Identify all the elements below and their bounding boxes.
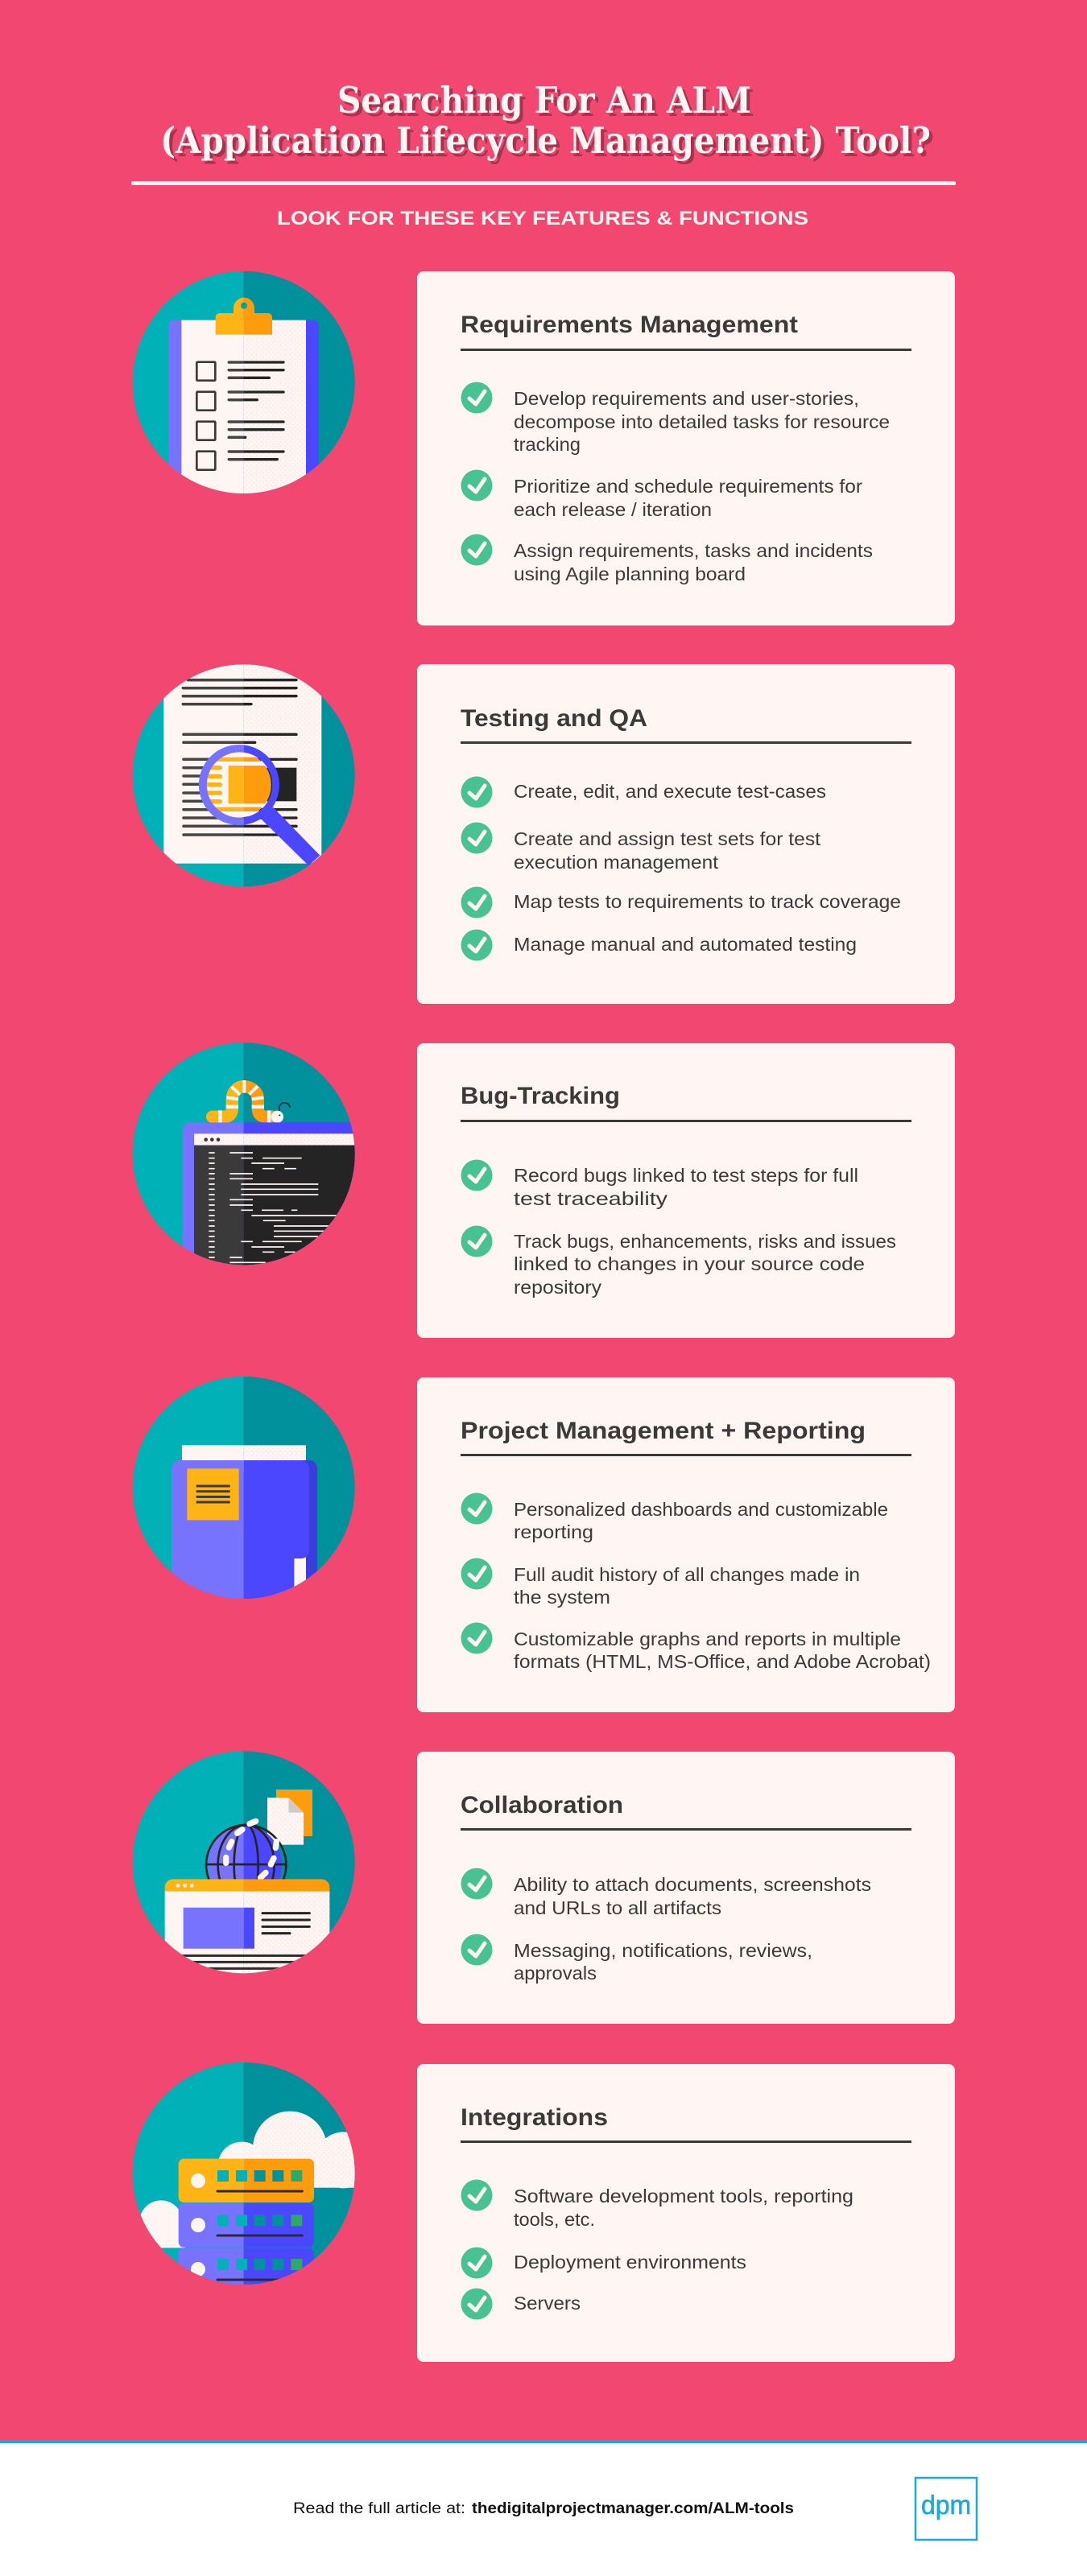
title: Searching For An ALM xyxy=(337,79,751,122)
bullet item: reporting xyxy=(514,1521,593,1542)
bullet item: Ability to attach documents, screenshots xyxy=(514,1874,871,1895)
heading: Collaboration xyxy=(461,1792,623,1818)
footer text xyxy=(293,2500,794,2517)
bullet item: formats (HTML, MS-Office, and Adobe Acrobat) xyxy=(514,1651,931,1672)
bullet item: execution management xyxy=(514,852,719,873)
bullet item: Manage manual and automated testing xyxy=(514,934,857,955)
bullet item: Create, edit, and execute test-cases xyxy=(514,781,826,802)
bullet item: Track bugs, enhancements, risks and issues xyxy=(514,1231,896,1252)
bullet item: approvals xyxy=(514,1963,597,1984)
bullet item: Software development tools, reporting xyxy=(514,2186,853,2207)
bullet item xyxy=(461,470,862,520)
bullet item xyxy=(461,1159,858,1209)
bullet item xyxy=(461,1868,871,1918)
icon: document with magnifying glass xyxy=(132,664,355,887)
dpm logo xyxy=(915,2478,977,2540)
bullet item xyxy=(461,1623,931,1672)
panel: Testing and QA xyxy=(417,664,955,1004)
bullet item xyxy=(461,887,901,918)
bullet item: Develop requirements and user-stories, xyxy=(514,388,859,409)
bullet item: Servers xyxy=(514,2293,581,2314)
bullet item xyxy=(461,1934,812,1984)
bullet item: Full audit history of all changes made in xyxy=(514,1564,860,1585)
bullet item: the system xyxy=(514,1587,610,1608)
bullet item xyxy=(461,2180,853,2230)
bullet item: and URLs to all artifacts xyxy=(514,1897,721,1918)
bullet item: Deployment environments xyxy=(514,2252,746,2273)
heading: Integrations xyxy=(461,2104,608,2131)
panel: Project Management + Reporting xyxy=(417,1377,955,1712)
bullet item xyxy=(461,2288,581,2320)
bullet item: repository xyxy=(514,1277,602,1298)
bullet item xyxy=(461,1225,896,1298)
heading: Bug-Tracking xyxy=(461,1083,620,1109)
icon: clipboard xyxy=(132,271,355,493)
bullet item: Map tests to requirements to track coverage xyxy=(514,891,901,912)
bullet item: using Agile planning board xyxy=(514,564,746,584)
footer text: thedigitalprojectmanager.com/ALM-tools xyxy=(472,2500,794,2517)
panel: Integrations xyxy=(417,2064,955,2362)
heading: Requirements Management xyxy=(461,312,798,338)
heading: Project Management + Reporting xyxy=(461,1418,866,1444)
title xyxy=(160,79,931,162)
bullet item xyxy=(461,535,873,584)
bullet item: test traceability xyxy=(514,1188,668,1209)
panel: Bug-Tracking xyxy=(417,1043,955,1338)
bullet item: Assign requirements, tasks and incidents xyxy=(514,540,873,561)
icon: folder xyxy=(132,1377,355,1599)
panel: Requirements Management xyxy=(417,271,955,625)
bullet item: decompose into detailed tasks for resource xyxy=(514,411,890,432)
title: (Application Lifecycle Management) Tool? xyxy=(160,119,931,162)
dpm logo: dpm xyxy=(921,2490,971,2520)
bullet item xyxy=(461,2248,746,2278)
bullet item: Prioritize and schedule requirements for xyxy=(514,476,862,497)
icon: servers and clouds xyxy=(132,2062,355,2285)
bullet item xyxy=(461,1492,888,1542)
bullet item xyxy=(461,776,826,808)
footer text: Read the full article at: xyxy=(293,2500,465,2517)
bullet item: Create and assign test sets for test xyxy=(514,828,821,849)
bullet item: each release / iteration xyxy=(514,499,712,520)
bullet item: tracking xyxy=(514,434,581,455)
bullet item xyxy=(461,929,857,961)
bullet item: tools, etc. xyxy=(514,2209,595,2230)
bullet item xyxy=(461,382,890,455)
bullet item: Personalized dashboards and customizable xyxy=(514,1499,888,1520)
panel: Collaboration xyxy=(417,1752,955,2024)
bullet item: Record bugs linked to test steps for full xyxy=(514,1165,858,1186)
bullet item xyxy=(461,1558,860,1608)
subtitle: LOOK FOR THESE KEY FEATURES & FUNCTIONS xyxy=(277,208,808,229)
footer xyxy=(0,2440,1087,2576)
heading: Testing and QA xyxy=(461,705,647,732)
icon: globe, files and browser xyxy=(132,1751,355,1974)
bullet item: linked to changes in your source code xyxy=(514,1253,865,1274)
bullet item xyxy=(461,823,821,873)
bullet item: Messaging, notifications, reviews, xyxy=(514,1940,812,1961)
bullet item: Customizable graphs and reports in multiple xyxy=(514,1629,901,1649)
icon: worm on code window xyxy=(132,1042,355,1265)
